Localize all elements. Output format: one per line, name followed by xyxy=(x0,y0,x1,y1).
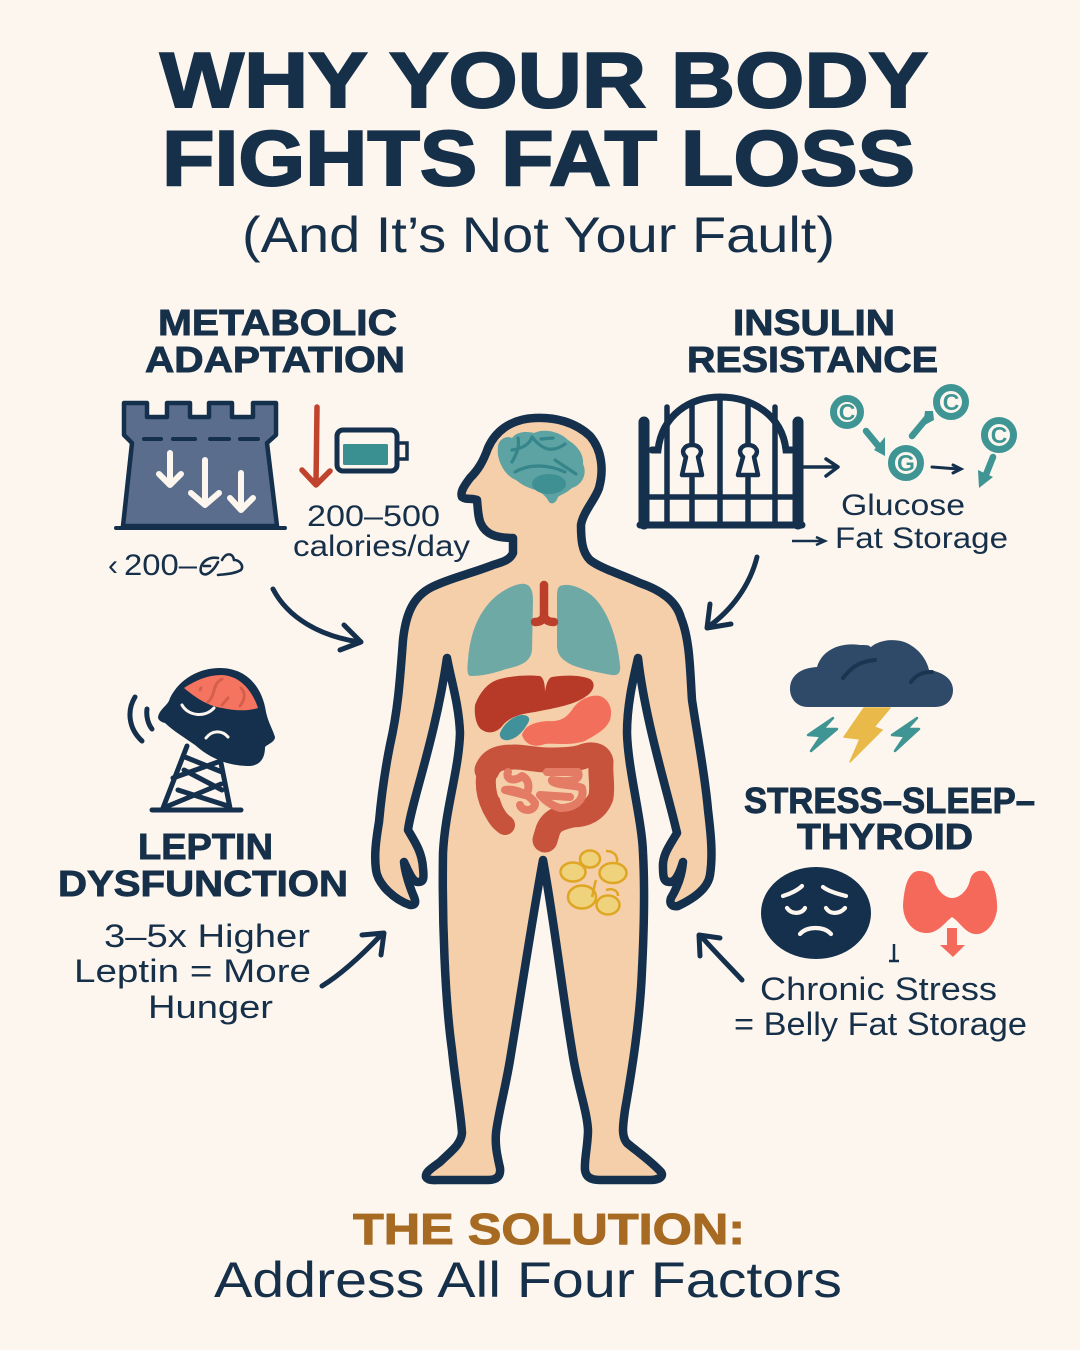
large intestine xyxy=(486,755,602,840)
heading: insulin resistance: RESISTANCE xyxy=(687,339,938,380)
solution: THE SOLUTION: xyxy=(353,1205,745,1254)
solution: Address All Four Factors xyxy=(214,1252,842,1308)
panel: metabolic adaptation xyxy=(108,302,470,582)
title: WHY YOUR BODY xyxy=(160,36,928,124)
text: glucose to fat storage xyxy=(792,489,1008,555)
text: garbled range label: ‹ xyxy=(108,549,118,582)
heading: leptin dysfunction: LEPTIN xyxy=(138,826,273,867)
brain xyxy=(498,431,585,503)
panel: insulin resistance xyxy=(640,302,1014,555)
title xyxy=(160,36,928,202)
heading: insulin resistance xyxy=(687,302,938,380)
arrow: leptin to body xyxy=(322,933,384,986)
arrow: stress to body xyxy=(699,935,742,980)
heading: insulin resistance: INSULIN xyxy=(733,302,895,343)
liver xyxy=(475,675,594,732)
panel: stress sleep thyroid xyxy=(734,640,1035,1042)
text: leptin hunger: 3–5x Higher xyxy=(104,918,310,954)
title: FIGHTS FAT LOSS xyxy=(162,114,915,202)
icon: glucose molecules: C xyxy=(943,389,959,415)
heading: leptin dysfunction xyxy=(58,826,348,904)
text: calories per day xyxy=(293,500,470,563)
heading: stress sleep thyroid: STRESS–SLEEP– xyxy=(744,780,1035,821)
heading: metabolic adaptation xyxy=(145,302,405,380)
body figure xyxy=(375,418,711,1180)
stomach xyxy=(522,696,611,746)
gallbladder xyxy=(500,715,529,740)
body silhouette xyxy=(375,418,711,1180)
text: glucose to fat storage: Glucose xyxy=(841,489,965,522)
icon: glucose molecules: C xyxy=(991,422,1007,448)
heading: metabolic adaptation: ADAPTATION xyxy=(145,339,405,380)
text: leptin hunger xyxy=(74,918,311,1025)
icon: battery xyxy=(337,430,407,471)
solution xyxy=(214,1205,842,1308)
icon: glucose molecules: C xyxy=(839,399,855,425)
arrow: insulin to body xyxy=(707,557,757,628)
lungs xyxy=(467,584,620,676)
icon: brain on signal tower xyxy=(130,668,275,810)
fat cells xyxy=(560,850,626,914)
text: leptin hunger: Hunger xyxy=(148,989,273,1025)
text: calories per day: 200–500 xyxy=(307,500,440,533)
heading: leptin dysfunction: DYSFUNCTION xyxy=(58,863,348,904)
heading: stress sleep thyroid xyxy=(744,780,1035,857)
text: glucose to fat storage: Fat Storage xyxy=(835,522,1008,555)
trachea xyxy=(535,585,554,622)
panel: leptin dysfunction xyxy=(58,668,348,1025)
text: chronic stress: = Belly Fat Storage xyxy=(734,1006,1027,1042)
arrow: metabolic to body xyxy=(273,589,361,650)
icon: thyroid xyxy=(903,871,997,957)
icon: glucose molecules xyxy=(834,388,1014,488)
icon: storm cloud xyxy=(790,640,953,762)
small intestine xyxy=(505,772,583,810)
icon: glucose molecules: G xyxy=(897,450,915,476)
text: calories per day: calories/day xyxy=(293,530,470,563)
subtitle: (And It’s Not Your Fault) xyxy=(242,207,835,263)
icon: small marker xyxy=(889,944,899,961)
icon: fortress xyxy=(116,403,285,528)
text: chronic stress xyxy=(734,971,1027,1042)
icon: locked gate xyxy=(640,397,838,525)
icon: red down arrow xyxy=(302,407,330,485)
icon: tired face xyxy=(761,867,871,959)
text: garbled range label: 200– xyxy=(124,549,197,582)
heading: stress sleep thyroid: THYROID xyxy=(797,816,973,857)
heading: metabolic adaptation: METABOLIC xyxy=(158,302,397,343)
text: garbled range label xyxy=(108,549,242,582)
text: chronic stress: Chronic Stress xyxy=(760,971,997,1007)
text: leptin hunger: Leptin = More xyxy=(74,953,311,989)
